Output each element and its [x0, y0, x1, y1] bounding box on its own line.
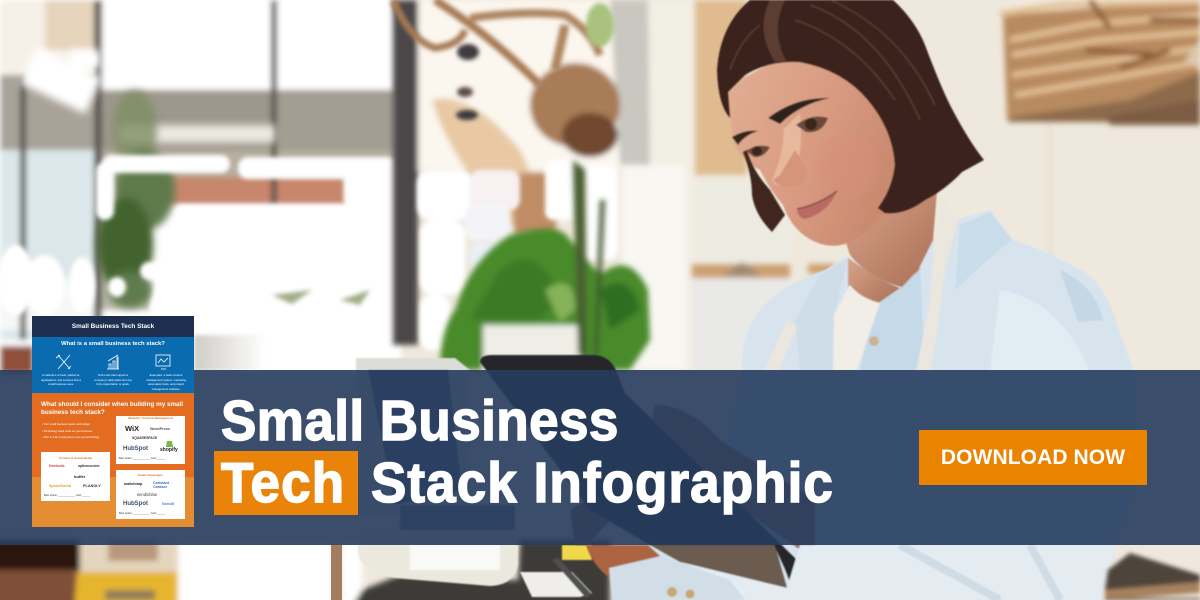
download button	[919, 430, 1147, 485]
wooden shelf with stacked fibres	[1000, 0, 1200, 125]
card: social media: PLANOLY	[83, 484, 101, 488]
thumbnail bullets: • Your small business needs and budget	[42, 423, 90, 426]
thumbnail blue section: Examples: a basic content management system, marketing automation tools, and project management software.	[146, 373, 186, 390]
thumbnail blue section: What is a small business tech stack?	[61, 341, 165, 347]
thumbnail orange section	[32, 393, 194, 477]
title line 1: Small Business	[221, 389, 619, 453]
right shelf lower	[1105, 553, 1200, 600]
card: social media: Content & Social Media	[59, 456, 92, 460]
card: website content: WordPress	[150, 427, 170, 431]
face	[728, 60, 900, 246]
card: website content: Best option:____________ Cost:______	[119, 457, 165, 460]
card: social media: optinmonster	[78, 464, 100, 468]
hand silhouette under band	[650, 405, 815, 560]
desk and foreground	[0, 540, 610, 600]
card: social media: buffer	[74, 474, 85, 479]
scene under banner: device, tablet and hands	[356, 358, 518, 586]
neck	[845, 190, 937, 287]
mini infographic thumbnail	[32, 316, 194, 527]
card: email campaigns: Email Campaigns	[138, 473, 163, 477]
card: email campaigns: Constant Contact	[153, 481, 169, 489]
card: social media	[41, 452, 110, 501]
card: email campaigns: mailchimp	[124, 482, 142, 486]
card: email campaigns: SendX	[162, 501, 174, 506]
card: email campaigns: sendinblue	[137, 492, 157, 497]
blurred plant left	[97, 90, 175, 308]
card: social media: Best option:____________ Cost:______	[44, 494, 90, 497]
hair	[717, 0, 984, 232]
thumbnail blue section	[32, 337, 194, 393]
card: email campaigns: Best option:____________ Cost:______	[119, 512, 165, 515]
card: social media: Hootsuite	[49, 464, 65, 468]
thumbnail bullets: • Technology stack scale as your business	[42, 430, 92, 432]
thumbnail bullets	[42, 423, 100, 439]
card: website content: Website / Content Management	[128, 416, 173, 420]
thumbnail blue section: Tech tools that support a company's daily tasks and any form organization or goals.	[94, 373, 132, 386]
card: email campaigns	[116, 470, 185, 519]
card: website content: shopify	[160, 447, 178, 453]
tablet body	[480, 355, 797, 582]
download button: DOWNLOAD NOW	[941, 446, 1125, 469]
card: email campaigns: HubSpot	[123, 501, 148, 507]
banner band	[0, 370, 1200, 545]
title line 2: Stack Infographic	[371, 451, 834, 515]
card: website content: WiX	[125, 424, 139, 433]
woman: hidden lower scene under the banner	[610, 200, 1140, 600]
card: website content	[116, 416, 185, 464]
card: website content: SQUARESPACE	[132, 436, 157, 440]
card: website content: HubSpot	[123, 446, 148, 452]
title highlight: Tech	[214, 451, 358, 515]
thumbnail header: Small Business Tech Stack	[72, 323, 154, 330]
left interior	[0, 0, 400, 375]
hand below band	[586, 545, 664, 595]
icons row	[56, 354, 170, 370]
bokeh highlights	[0, 155, 400, 345]
thumbnail header	[32, 316, 194, 337]
middle: wall, branches, plant	[393, 0, 695, 370]
card: social media: SproutSocial	[49, 484, 71, 488]
thumbnail orange heading: What should I consider when building my small business tech stack?	[41, 401, 183, 416]
thumbnail bullets: • Plan to train employees to use new technology	[42, 436, 99, 439]
shirt cuff	[609, 556, 746, 600]
thumbnail blue section: A collection of tools, platforms, applications, and services that a small business uses.	[41, 373, 81, 386]
title word: Tech: Tech	[221, 451, 345, 515]
